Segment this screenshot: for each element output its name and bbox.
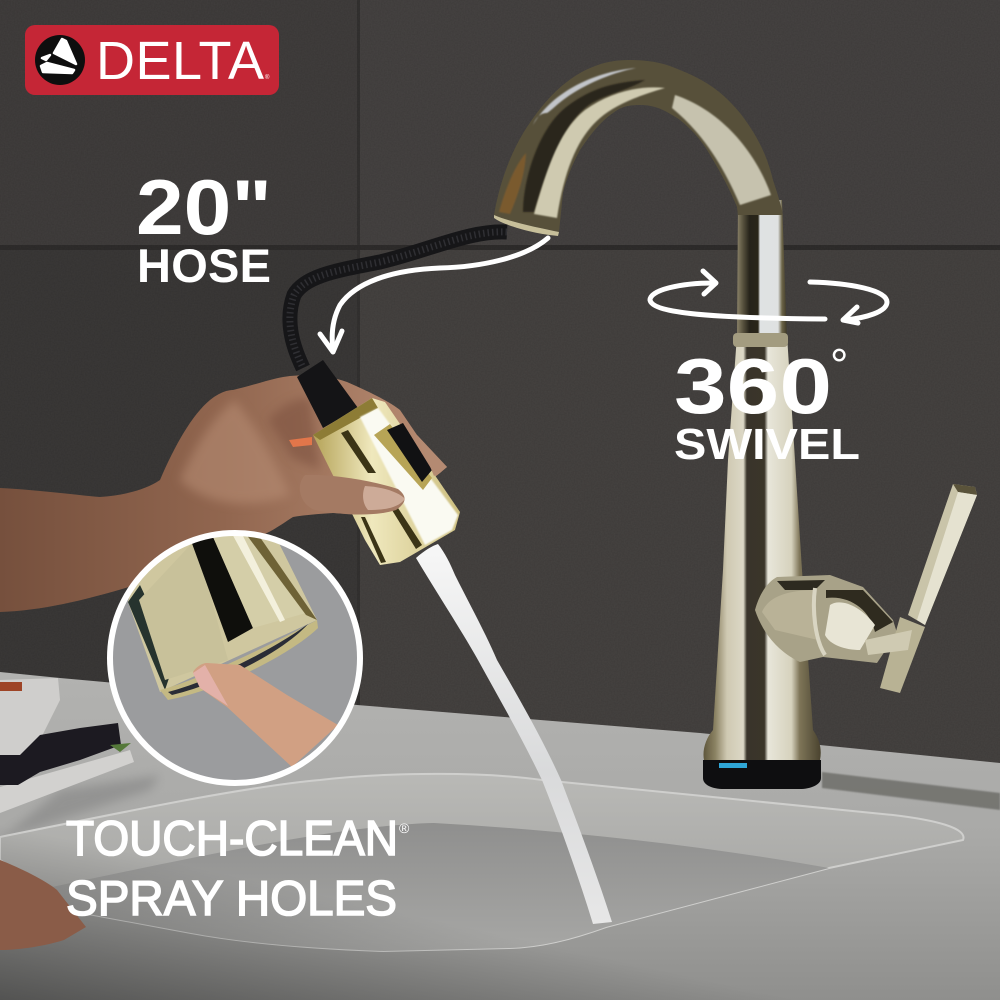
inset circle: touch-clean spray holes (110, 510, 360, 783)
spout tip (494, 215, 559, 236)
finger shadow (268, 398, 320, 470)
faucet collar (733, 333, 788, 347)
spout right reflection (672, 95, 771, 205)
inset spray head (128, 536, 318, 700)
blackberries dish (0, 678, 134, 813)
callout: touch-clean spray holes (66, 812, 410, 926)
inset backdrop (110, 533, 360, 783)
white stripe (360, 408, 458, 545)
forearm and hand (0, 375, 447, 612)
counter vignette (0, 780, 1000, 1000)
callout: 20 inch hose: 20" (136, 163, 272, 251)
faucet neck (737, 200, 787, 340)
palm highlight (180, 400, 290, 503)
hose (290, 232, 507, 368)
forearm and palm (0, 375, 447, 612)
spout top highlight (533, 68, 636, 125)
spout dark reflection (523, 80, 645, 212)
faucet body (703, 335, 821, 760)
arrow: swivel rotation (650, 271, 887, 323)
coupling (297, 360, 358, 428)
faucet base (703, 760, 821, 789)
berries (0, 723, 121, 785)
handle collar (880, 617, 925, 693)
thumbnail (363, 486, 405, 510)
logo icon (35, 35, 85, 85)
inset finger (193, 663, 338, 767)
dark stripes (341, 430, 376, 473)
callout: touch-clean spray holes: ® (399, 820, 410, 836)
faucet gooseneck spout (494, 60, 783, 232)
faucet (494, 60, 977, 789)
spray head body (313, 398, 460, 565)
faucet lever (908, 484, 977, 625)
callout: touch-clean spray holes: TOUCH-CLEAN (66, 812, 398, 866)
countertop (0, 672, 1000, 1000)
nozzle face (160, 620, 318, 700)
arrow: hose extension (320, 238, 548, 352)
spout amber reflection (499, 153, 526, 214)
button frame (374, 424, 432, 490)
fingers bottom-left (0, 860, 86, 950)
inset ring (110, 533, 360, 783)
registered mark: ® (265, 74, 270, 81)
callout: 20 inch hose (136, 163, 272, 292)
spout gold reflection (534, 87, 665, 218)
dish (0, 750, 134, 813)
callout: touch-clean spray holes: SPRAY HOLES (66, 872, 397, 926)
water stream (416, 544, 612, 924)
callout: 360 swivel: ° (830, 339, 848, 391)
Delta logo badge (25, 25, 279, 95)
touch indicator light (719, 763, 747, 768)
top ring (313, 398, 378, 440)
thumb (300, 475, 405, 515)
sink wall (0, 774, 964, 951)
logo wordmark: DELTA (96, 31, 264, 91)
callout: 360 swivel (674, 339, 860, 469)
callout: 360 swivel: SWIVEL (674, 420, 860, 469)
bowl (0, 678, 60, 770)
callout: 20 inch hose: HOSE (137, 239, 271, 292)
leaf (110, 743, 131, 752)
red garnish (0, 682, 22, 691)
callout: 360 swivel: 360 (674, 342, 832, 430)
sink bowl (38, 823, 829, 951)
inset nail (193, 665, 228, 706)
sink basin (0, 774, 1000, 1000)
handle hub (755, 575, 897, 663)
lower finger tips (417, 435, 447, 476)
spray head (297, 360, 460, 565)
button (387, 423, 432, 482)
orange fingernail (289, 437, 312, 447)
